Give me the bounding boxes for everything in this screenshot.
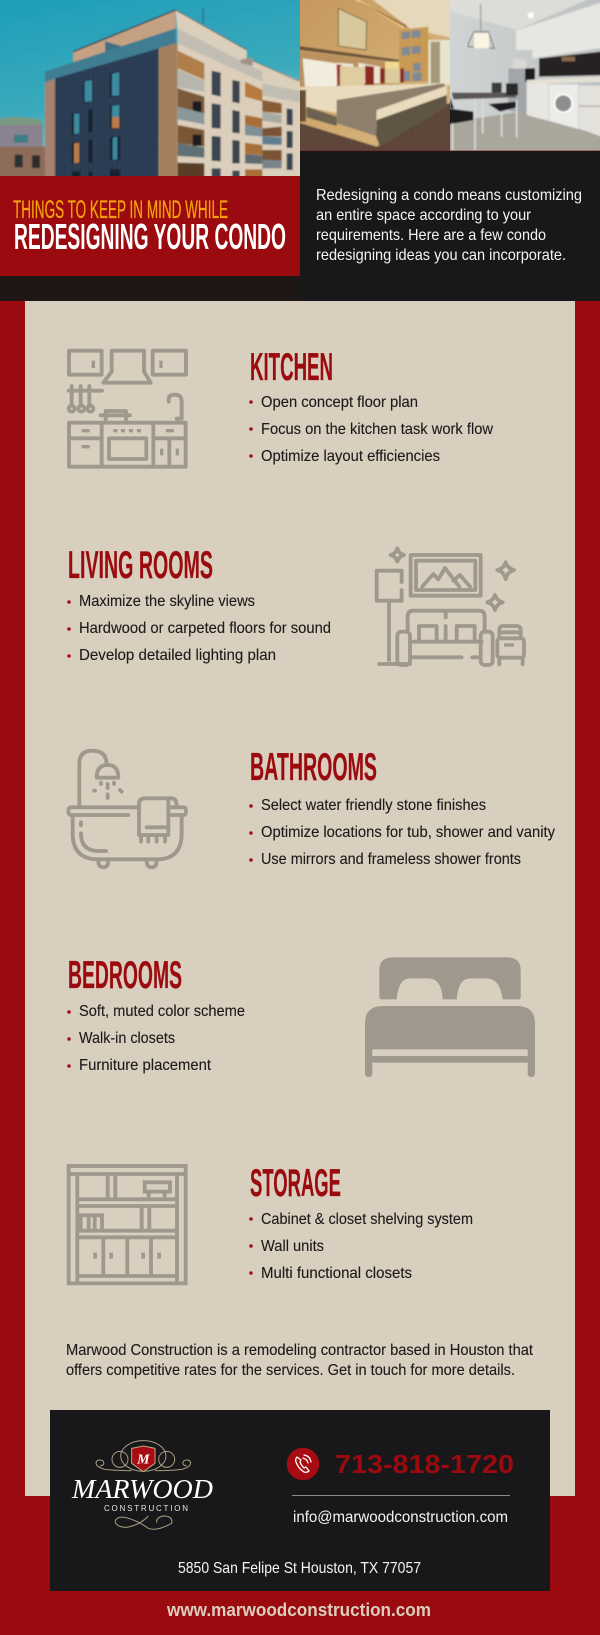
list: storage: Cabinet & closet shelving system — [261, 1211, 473, 1228]
address: 5850 San Felipe St Houston, TX 77057 — [178, 1560, 421, 1577]
title line 2: REDESIGNING YOUR CONDO — [14, 216, 286, 257]
intro text block: Redesigning a condo means customizing — [316, 187, 582, 204]
logo wordmark: MARWOOD — [71, 1474, 214, 1504]
icon: living room — [377, 548, 524, 665]
title line 1: THINGS TO KEEP IN MIND WHILE — [13, 196, 228, 224]
list: kitchen — [249, 394, 493, 465]
list: bedrooms — [67, 1003, 245, 1074]
list: bathrooms: Optimize locations for tub, shower and vanity — [261, 824, 555, 841]
section: bathrooms — [68, 746, 555, 868]
list: storage: Wall units — [261, 1238, 324, 1255]
list: storage: Multi functional closets — [261, 1265, 412, 1282]
list: kitchen: Optimize layout efficiencies — [261, 448, 440, 465]
list: bedrooms: Walk-in closets — [79, 1030, 175, 1047]
section: storage: STORAGE — [250, 1162, 341, 1205]
logo shield — [132, 1446, 155, 1472]
list: bathrooms: Select water friendly stone finishes — [261, 797, 486, 814]
closing paragraph — [66, 1342, 534, 1379]
intro text block — [316, 187, 582, 264]
section: bedrooms — [67, 954, 535, 1077]
main beige panel — [25, 301, 575, 1496]
section: kitchen: KITCHEN — [250, 346, 333, 389]
dark ground strip under title — [0, 276, 300, 301]
list: kitchen: Open concept floor plan — [261, 394, 418, 411]
section: bedrooms: BEDROOMS — [68, 954, 182, 997]
facade windows — [72, 71, 120, 187]
dark block behind intro — [300, 151, 600, 301]
intro text block: redesigning ideas you can incorporate. — [316, 247, 566, 264]
balconies — [178, 51, 204, 80]
phone number: 713-818-1720 — [335, 1449, 514, 1479]
photo: condo building — [0, 0, 310, 187]
email: info@marwoodconstruction.com — [293, 1509, 508, 1526]
section: kitchen — [69, 346, 493, 467]
list: living rooms: Maximize the skyline views — [79, 593, 255, 610]
list: bedrooms: Furniture placement — [79, 1057, 212, 1074]
logo subline: CONSTRUCTION — [104, 1504, 188, 1513]
icon: bathtub — [68, 751, 186, 867]
panel: hero title — [0, 176, 300, 276]
icon: phone — [287, 1448, 319, 1480]
icon: shelving unit — [69, 1166, 186, 1283]
panel: contact footer — [50, 1410, 550, 1591]
heading: living rooms: LIVING ROOMS — [68, 544, 213, 587]
heading: bathrooms: BATHROOMS — [250, 746, 377, 789]
list: living rooms — [67, 593, 331, 664]
list: kitchen: Focus on the kitchen task work flow — [261, 421, 493, 438]
logo: Marwood Construction — [71, 1441, 214, 1529]
closing paragraph: offers competitive rates for the services. Get in touch for more details. — [66, 1362, 515, 1379]
list: living rooms: Develop detailed lighting plan — [79, 647, 276, 664]
intro text block: an entire space according to your — [316, 207, 532, 224]
list: storage — [249, 1211, 473, 1282]
list: bathrooms: Use mirrors and frameless shower fronts — [261, 851, 521, 868]
section: storage — [69, 1162, 473, 1283]
website url: www.marwoodconstruction.com — [166, 1600, 431, 1620]
list: bathrooms — [249, 797, 555, 868]
intro text block: requirements. Here are a few condo — [316, 227, 546, 244]
closing paragraph: Marwood Construction is a remodeling contractor based in Houston that — [66, 1342, 534, 1359]
list: living rooms: Hardwood or carpeted floors for sound — [79, 620, 331, 637]
section: living rooms — [67, 544, 524, 665]
list: bedrooms: Soft, muted color scheme — [79, 1003, 245, 1020]
photo: bedroom — [300, 0, 450, 151]
logo shield: M — [136, 1452, 150, 1467]
icon: kitchen — [69, 351, 186, 467]
icon: bed — [365, 957, 535, 1077]
photo: kitchen and dining — [450, 0, 600, 151]
